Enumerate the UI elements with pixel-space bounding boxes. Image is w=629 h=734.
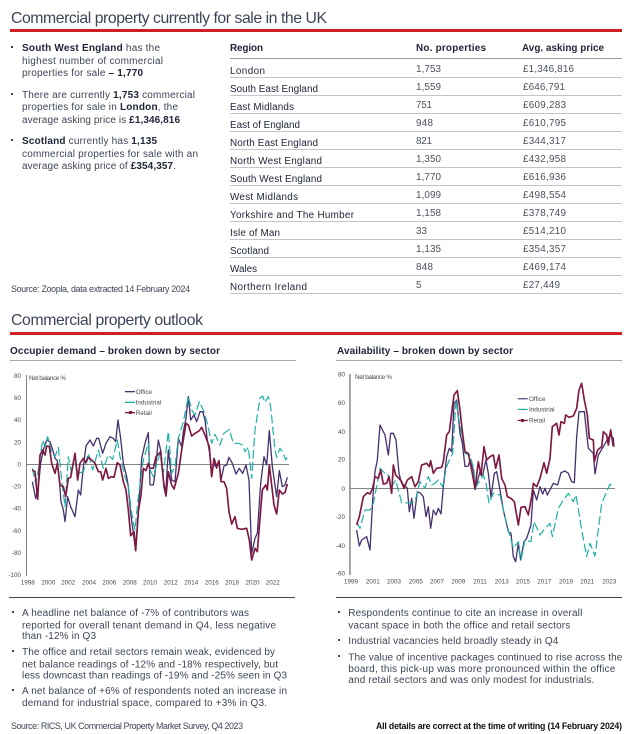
series: retail [32, 423, 287, 560]
series: office [357, 400, 614, 562]
table rows: 5 [416, 280, 422, 291]
panel: occupier demand commentary: demand for industrial space, compared to +3% in Q3. [22, 698, 267, 709]
panel: occupier demand commentary: less downcast than readings of -19% and -25% seen in Q3 [22, 670, 287, 682]
chart: availability line chart: -60 [336, 570, 345, 578]
title: commercial property for sale: Commercial property currently for sale in the UK [11, 10, 327, 27]
title: commercial property outlook: Commercial property outlook [11, 312, 203, 329]
source: Zoopla: Source: Zoopla, data extracted 14 February 2024 [11, 284, 190, 294]
series: industrial [357, 400, 612, 560]
table rows: South East England [230, 84, 318, 95]
chart: occupier demand line chart: -60 [12, 528, 21, 535]
chart: availability line chart: 2023 [602, 578, 617, 586]
panel: availability commentary: Respondents continue to cite an increase in overall [348, 608, 582, 619]
table rows: North East England [230, 138, 318, 149]
table rows [230, 64, 622, 294]
chart: availability line chart: 2013 [495, 578, 509, 586]
chart: occupier demand line chart: 20 [14, 440, 21, 446]
table rows: £344,317 [523, 136, 566, 147]
table rows: £27,449 [523, 280, 560, 291]
table rows: £514,210 [523, 226, 566, 237]
table header: Region [230, 43, 263, 54]
table header [230, 43, 622, 59]
panel: key facts bullets: commercial properties for sale with an [22, 149, 198, 160]
table rows: £354,357 [523, 244, 566, 255]
table rows: 751 [416, 100, 432, 111]
table rows: North West England [230, 156, 322, 167]
table rows: East of England [230, 120, 300, 131]
title: commercial property outlook [10, 312, 622, 335]
chart: availability line chart: -20 [336, 514, 345, 521]
panel: key facts bullets [11, 43, 198, 172]
panel: occupier demand commentary [9, 597, 295, 709]
panel: occupier demand commentary: reported for overall tenant demand in Q4, less negative [22, 620, 276, 632]
table rows: £609,283 [523, 100, 566, 111]
chart: occupier demand line chart: -40 [12, 506, 21, 512]
table rows: £378,749 [523, 208, 566, 219]
panel: key facts bullets: properties for sale – 1,770 [22, 68, 143, 79]
legend: occupier demand: Industrial [136, 400, 161, 406]
panel: occupier demand commentary: The office and retail sectors remain weak, evidenced by [22, 647, 275, 658]
chart: occupier demand line chart: 2002 [61, 580, 76, 586]
chart: availability line chart: 0 [341, 486, 345, 493]
table rows: 1,135 [416, 244, 442, 255]
chart: availability line chart: 20 [338, 456, 345, 464]
table rows: 33 [416, 226, 428, 237]
legend: occupier demand: Retail [136, 410, 152, 417]
panel: availability commentary: board, this pick-up was more pronounced within the office [348, 664, 616, 675]
table rows: £498,554 [523, 190, 566, 201]
table rows: 1,770 [416, 172, 442, 183]
chart: availability line chart: 2007 [430, 578, 444, 586]
panel: occupier demand commentary: A headline net balance of -7% of contributors was [22, 608, 249, 619]
table rows: 1,099 [416, 190, 442, 201]
panel: key facts bullets: Scotland currently has 1,135 [22, 136, 157, 147]
chart: availability line chart: 2021 [580, 578, 595, 586]
panel: key facts bullets: average asking price is £1,346,816 [22, 115, 180, 126]
legend: occupier demand [125, 389, 161, 417]
table rows: 848 [416, 262, 434, 273]
panel: key facts bullets: South West England has the [22, 43, 160, 54]
chart: occupier demand line chart: 2004 [82, 580, 96, 586]
legend: availability: Industrial [529, 406, 555, 414]
table rows: £1,346,816 [523, 64, 574, 75]
series: industrial [32, 396, 288, 530]
table rows: Yorkshire and The Humber [230, 210, 355, 221]
table rows: 948 [416, 118, 434, 129]
series: retail [357, 383, 613, 525]
panel: key facts bullets: average asking price of £354,357. [22, 161, 176, 172]
chart: occupier demand line chart: 2014 [184, 580, 199, 586]
source: RICS: Source: RICS, UK Commercial Property Market Survey, Q4 2023 [11, 721, 243, 731]
heading: occupier demand: Occupier demand – broken down by sector [10, 346, 220, 357]
chart: availability line chart: 2017 [537, 578, 552, 586]
chart: occupier demand line chart: -20 [12, 484, 21, 490]
panel: occupier demand commentary: than -12% in Q3 [22, 631, 96, 642]
table rows: West Midlands [230, 192, 298, 203]
panel: availability commentary: The value of incentive packages continued to rise across the [348, 652, 623, 664]
table rows: Scotland [230, 246, 269, 257]
chart: availability line chart: 2005 [409, 578, 423, 586]
chart: availability line chart: 80 [338, 372, 345, 378]
chart: occupier demand line chart: 2018 [225, 580, 239, 586]
chart: occupier demand line chart: 2022 [266, 580, 280, 586]
chart: availability line chart: 1999 [344, 578, 358, 586]
table rows: £432,958 [523, 154, 566, 165]
chart: occupier demand line chart: Net balance % [29, 375, 66, 382]
legend: occupier demand: Office [136, 389, 153, 396]
chart: occupier demand line chart: 2012 [164, 580, 178, 586]
chart: occupier demand line chart: 40 [14, 417, 21, 424]
table rows: Wales [230, 264, 257, 275]
chart: occupier demand line chart: 2010 [143, 580, 157, 586]
title: commercial property for sale [10, 10, 622, 32]
legend: availability [518, 396, 555, 424]
panel: key facts bullets: highest number of commercial [22, 56, 163, 67]
chart: occupier demand line chart: 0 [17, 462, 21, 468]
heading: availability: Availability – broken down by sector [337, 346, 513, 357]
table header: No. properties [416, 43, 486, 54]
chart: occupier demand line chart: 60 [14, 395, 21, 402]
chart: occupier demand line chart: 2016 [205, 580, 219, 586]
legend: availability: Office [529, 396, 546, 403]
table: properties by region [230, 43, 622, 294]
chart: occupier demand line chart: 80 [14, 373, 21, 380]
chart: availability line chart: 2003 [387, 578, 401, 586]
chart: availability line chart: -40 [336, 543, 345, 550]
panel: key facts bullets: properties for sale in London, the [22, 102, 178, 113]
panel: availability commentary: vacant space in both the office and retail sectors [348, 620, 570, 632]
chart: occupier demand line chart: -100 [8, 572, 21, 579]
panel: availability commentary: Industrial vacancies held broadly steady in Q4 [348, 636, 559, 647]
chart: availability line chart [336, 372, 617, 586]
chart: availability line chart: 2001 [366, 578, 380, 586]
table rows: 821 [416, 136, 432, 147]
table rows: Isle of Man [230, 228, 280, 239]
chart: availability line chart: 2015 [516, 578, 530, 586]
legend: availability: Retail [529, 418, 545, 424]
chart: availability line chart: 2011 [473, 578, 487, 586]
table rows: London [230, 66, 265, 77]
panel: key facts bullets: There are currently 1,753 commercial [22, 90, 195, 101]
table header: Avg. asking price [522, 43, 604, 54]
chart: availability line chart: 2019 [559, 578, 573, 586]
table rows: 1,753 [416, 64, 442, 75]
chart: availability line chart: 40 [338, 429, 345, 436]
table rows: £646,791 [523, 82, 566, 93]
chart: occupier demand line chart: 2008 [123, 580, 137, 586]
panel: occupier demand commentary: net balance readings of -12% and -18% respectively, but [22, 660, 278, 670]
table rows: 1,158 [416, 208, 442, 219]
chart: availability line chart: 60 [338, 400, 345, 407]
chart: availability line chart: 2009 [451, 578, 466, 586]
chart: occupier demand line chart [8, 373, 289, 586]
panel: availability commentary: and retail sectors and was only modest for industrials. [348, 675, 594, 686]
table rows: £616,936 [523, 172, 566, 183]
table rows: 1,559 [416, 82, 442, 93]
table rows: Northern Ireland [230, 282, 307, 293]
note: details correct: All details are correct at the time of writing (14 February 2024) [376, 721, 622, 731]
chart: occupier demand line chart: -80 [12, 550, 21, 557]
panel: occupier demand commentary: A net balance of +6% of respondents noted an increase in [22, 686, 287, 697]
table rows: £469,174 [523, 262, 566, 273]
chart: occupier demand line chart: 1998 [21, 580, 35, 586]
table rows: East Midlands [230, 102, 294, 113]
chart: occupier demand line chart: 2006 [102, 580, 117, 586]
table rows: 1,350 [416, 154, 442, 165]
table rows: £610,795 [523, 118, 566, 129]
series: office [32, 397, 287, 553]
chart: occupier demand line chart: 2000 [41, 580, 56, 586]
panel: availability commentary [336, 597, 623, 686]
chart: availability line chart: Net balance % [355, 374, 392, 381]
chart: occupier demand line chart: 2020 [245, 580, 260, 586]
table rows: South West England [230, 174, 322, 185]
